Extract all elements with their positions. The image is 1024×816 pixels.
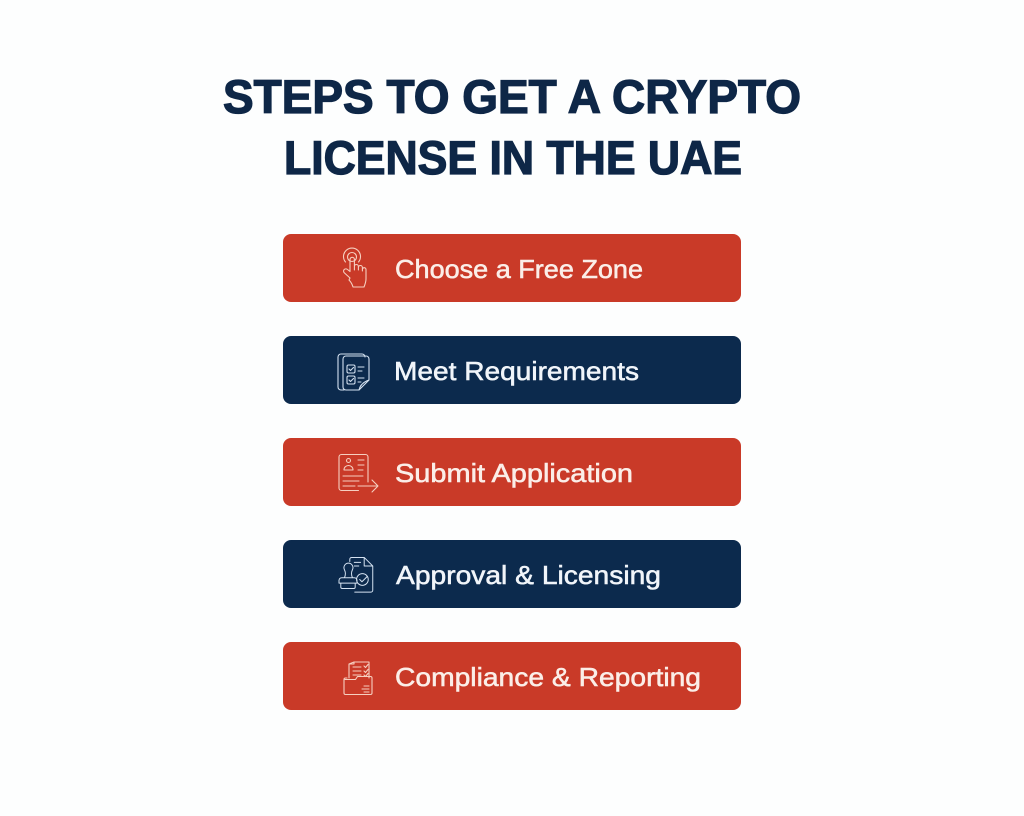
title: LICENSE IN THE UAE [284,131,742,184]
label: Compliance & Reporting [395,662,701,692]
icon: checklist [338,354,369,390]
step 4: Approval & Licensing [283,540,741,608]
label: Submit Application [395,458,633,488]
icon: pointing hand [344,248,366,287]
title [223,70,801,184]
icon: stamp and document [339,557,373,592]
label: Choose a Free Zone [395,254,643,284]
icon: folder with checklist [344,662,372,694]
step 2: Meet Requirements [283,336,741,404]
icon: application form with arrow [339,454,378,492]
step 5: Compliance & Reporting [283,642,741,710]
label: Meet Requirements [394,356,639,386]
step 1: Choose a Free Zone [283,234,741,302]
step 3: Submit Application [283,438,741,506]
title: STEPS TO GET A CRYPTO [223,70,801,123]
label: Approval & Licensing [396,560,661,590]
